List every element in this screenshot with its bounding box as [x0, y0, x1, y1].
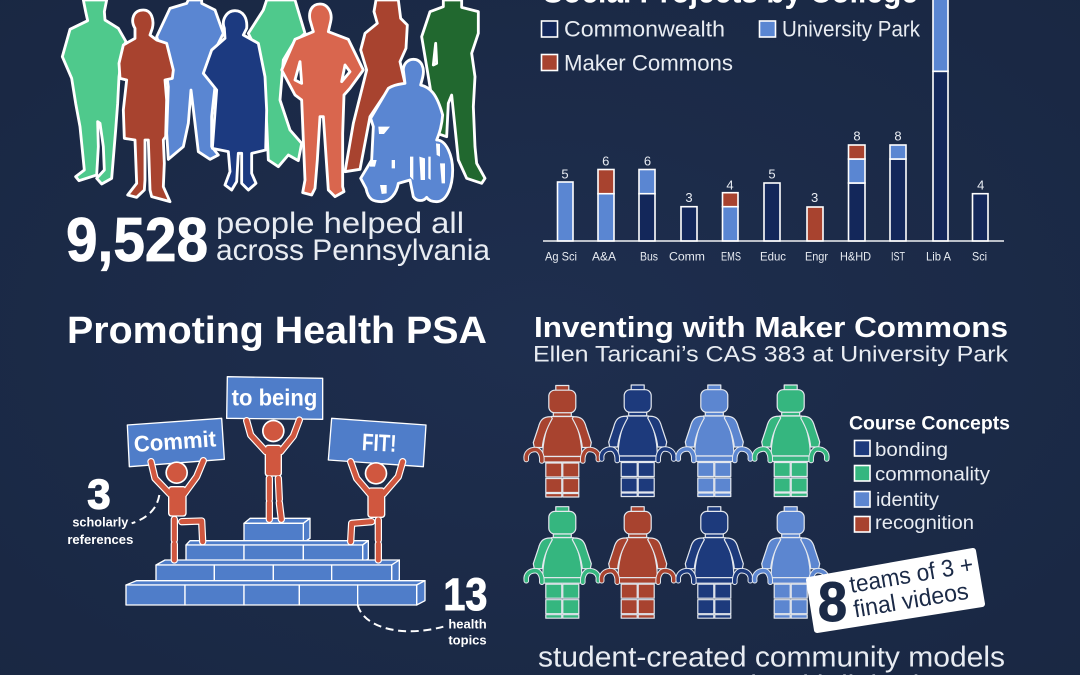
stacked bar chart: A&A [592, 250, 616, 264]
legend: Maker Commons [564, 50, 733, 76]
card: 8 teams of 3 + final videos: 8 [818, 570, 847, 633]
lego figures [526, 385, 827, 618]
brick podium [126, 518, 425, 605]
callout: 13 health topics: 13 [443, 569, 487, 620]
stacked bar chart: EMS [721, 250, 741, 264]
stacked bar chart: 3 [685, 190, 693, 205]
silhouette: navy woman [203, 11, 267, 190]
callout: 3 scholarly references [67, 470, 159, 547]
card: 8 teams of 3 + final videos: teams of 3 + [847, 551, 975, 599]
stacked bar chart: Comm [669, 250, 705, 264]
stacked bar chart: 8 [894, 128, 902, 143]
stat: 9,528: 9,528 [66, 206, 208, 275]
figure: left [151, 461, 203, 560]
text: people helped all across Pennsylvania [216, 207, 490, 267]
callout: 3 scholarly references: 3 [87, 470, 111, 517]
stacked bar chart [543, 0, 1004, 264]
silhouette: person in wheelchair [361, 59, 453, 202]
sign: FIT!: FIT! [361, 429, 397, 458]
stacked bar chart: 6 [644, 153, 651, 168]
figure: middle [247, 420, 299, 519]
text: people helped all across Pennsylvania: across Pennsylvania [216, 234, 490, 267]
stacked bar chart: 8 [853, 128, 861, 143]
sign: Commit: Commit [133, 425, 217, 457]
panel: promoting health PSA [67, 310, 487, 647]
card: 8 teams of 3 + final videos [809, 551, 982, 633]
stacked bar chart: 6 [602, 153, 609, 168]
text: people helped all across Pennsylvania: people helped all [216, 207, 464, 240]
stacked bar chart: Ag Sci [545, 250, 577, 264]
silhouette: green woman back [248, 0, 305, 167]
stacked bar chart: Educ [760, 250, 786, 264]
legend: course concepts: Course Concepts [849, 413, 1010, 434]
subheading: Ellen Taricani’s CAS 383 at University Park [533, 342, 1009, 367]
callout: 13 health topics [358, 569, 487, 647]
legend: course concepts [849, 413, 1010, 534]
stacked bar chart: 5 [561, 167, 569, 182]
silhouette: green man [62, 0, 126, 184]
legend: Commonwealth [564, 16, 725, 42]
panel: inventing with Maker Commons [526, 312, 1010, 675]
silhouette: light blue man [157, 0, 223, 159]
legend: course concepts: identity [876, 490, 940, 511]
callout: 3 scholarly references: references [67, 532, 133, 547]
legend: course concepts: recognition [875, 513, 974, 534]
sign: FIT! [328, 418, 426, 467]
silhouette: orange man [282, 4, 363, 197]
caption: student-created community models [538, 642, 1005, 674]
card: 8 teams of 3 + final videos: final videos [852, 578, 970, 623]
sign: Commit [127, 418, 224, 467]
silhouette: brick red woman back [345, 0, 407, 172]
panel: projects by college [542, 0, 1004, 264]
sign: to being [227, 377, 323, 419]
stacked bar chart: Lib A [926, 250, 951, 264]
callout: 13 health topics: health [448, 616, 487, 631]
stacked bar chart: IST [891, 250, 905, 264]
stacked bar chart: Sci [972, 250, 987, 264]
heading: Promoting Health PSA [67, 310, 487, 352]
legend: University Park [782, 16, 921, 42]
people silhouettes [62, 0, 485, 202]
panel: people helped [62, 0, 490, 275]
callout: 3 scholarly references: scholarly [72, 515, 129, 530]
legend [542, 16, 921, 76]
figure: right [351, 462, 403, 560]
stacked bar chart: Bus [640, 250, 658, 264]
stacked bar chart: 3 [811, 190, 818, 205]
illustration: figures on brick podium [67, 377, 487, 647]
stacked bar chart: 4 [726, 177, 734, 192]
callout: 13 health topics: topics [448, 632, 487, 647]
heading: Inventing with Maker Commons [534, 312, 1008, 344]
sign: to being: to being [232, 384, 317, 410]
silhouette: dark green man [422, 0, 485, 183]
stacked bar chart: 4 [977, 177, 984, 192]
stacked bar chart: H&HD [840, 250, 871, 264]
legend: course concepts: commonality [875, 465, 991, 486]
stacked bar chart: 5 [768, 167, 776, 182]
legend: course concepts: bonding [875, 440, 948, 461]
silhouette: brick red woman [119, 10, 173, 202]
stacked bar chart: Engr [805, 250, 828, 264]
